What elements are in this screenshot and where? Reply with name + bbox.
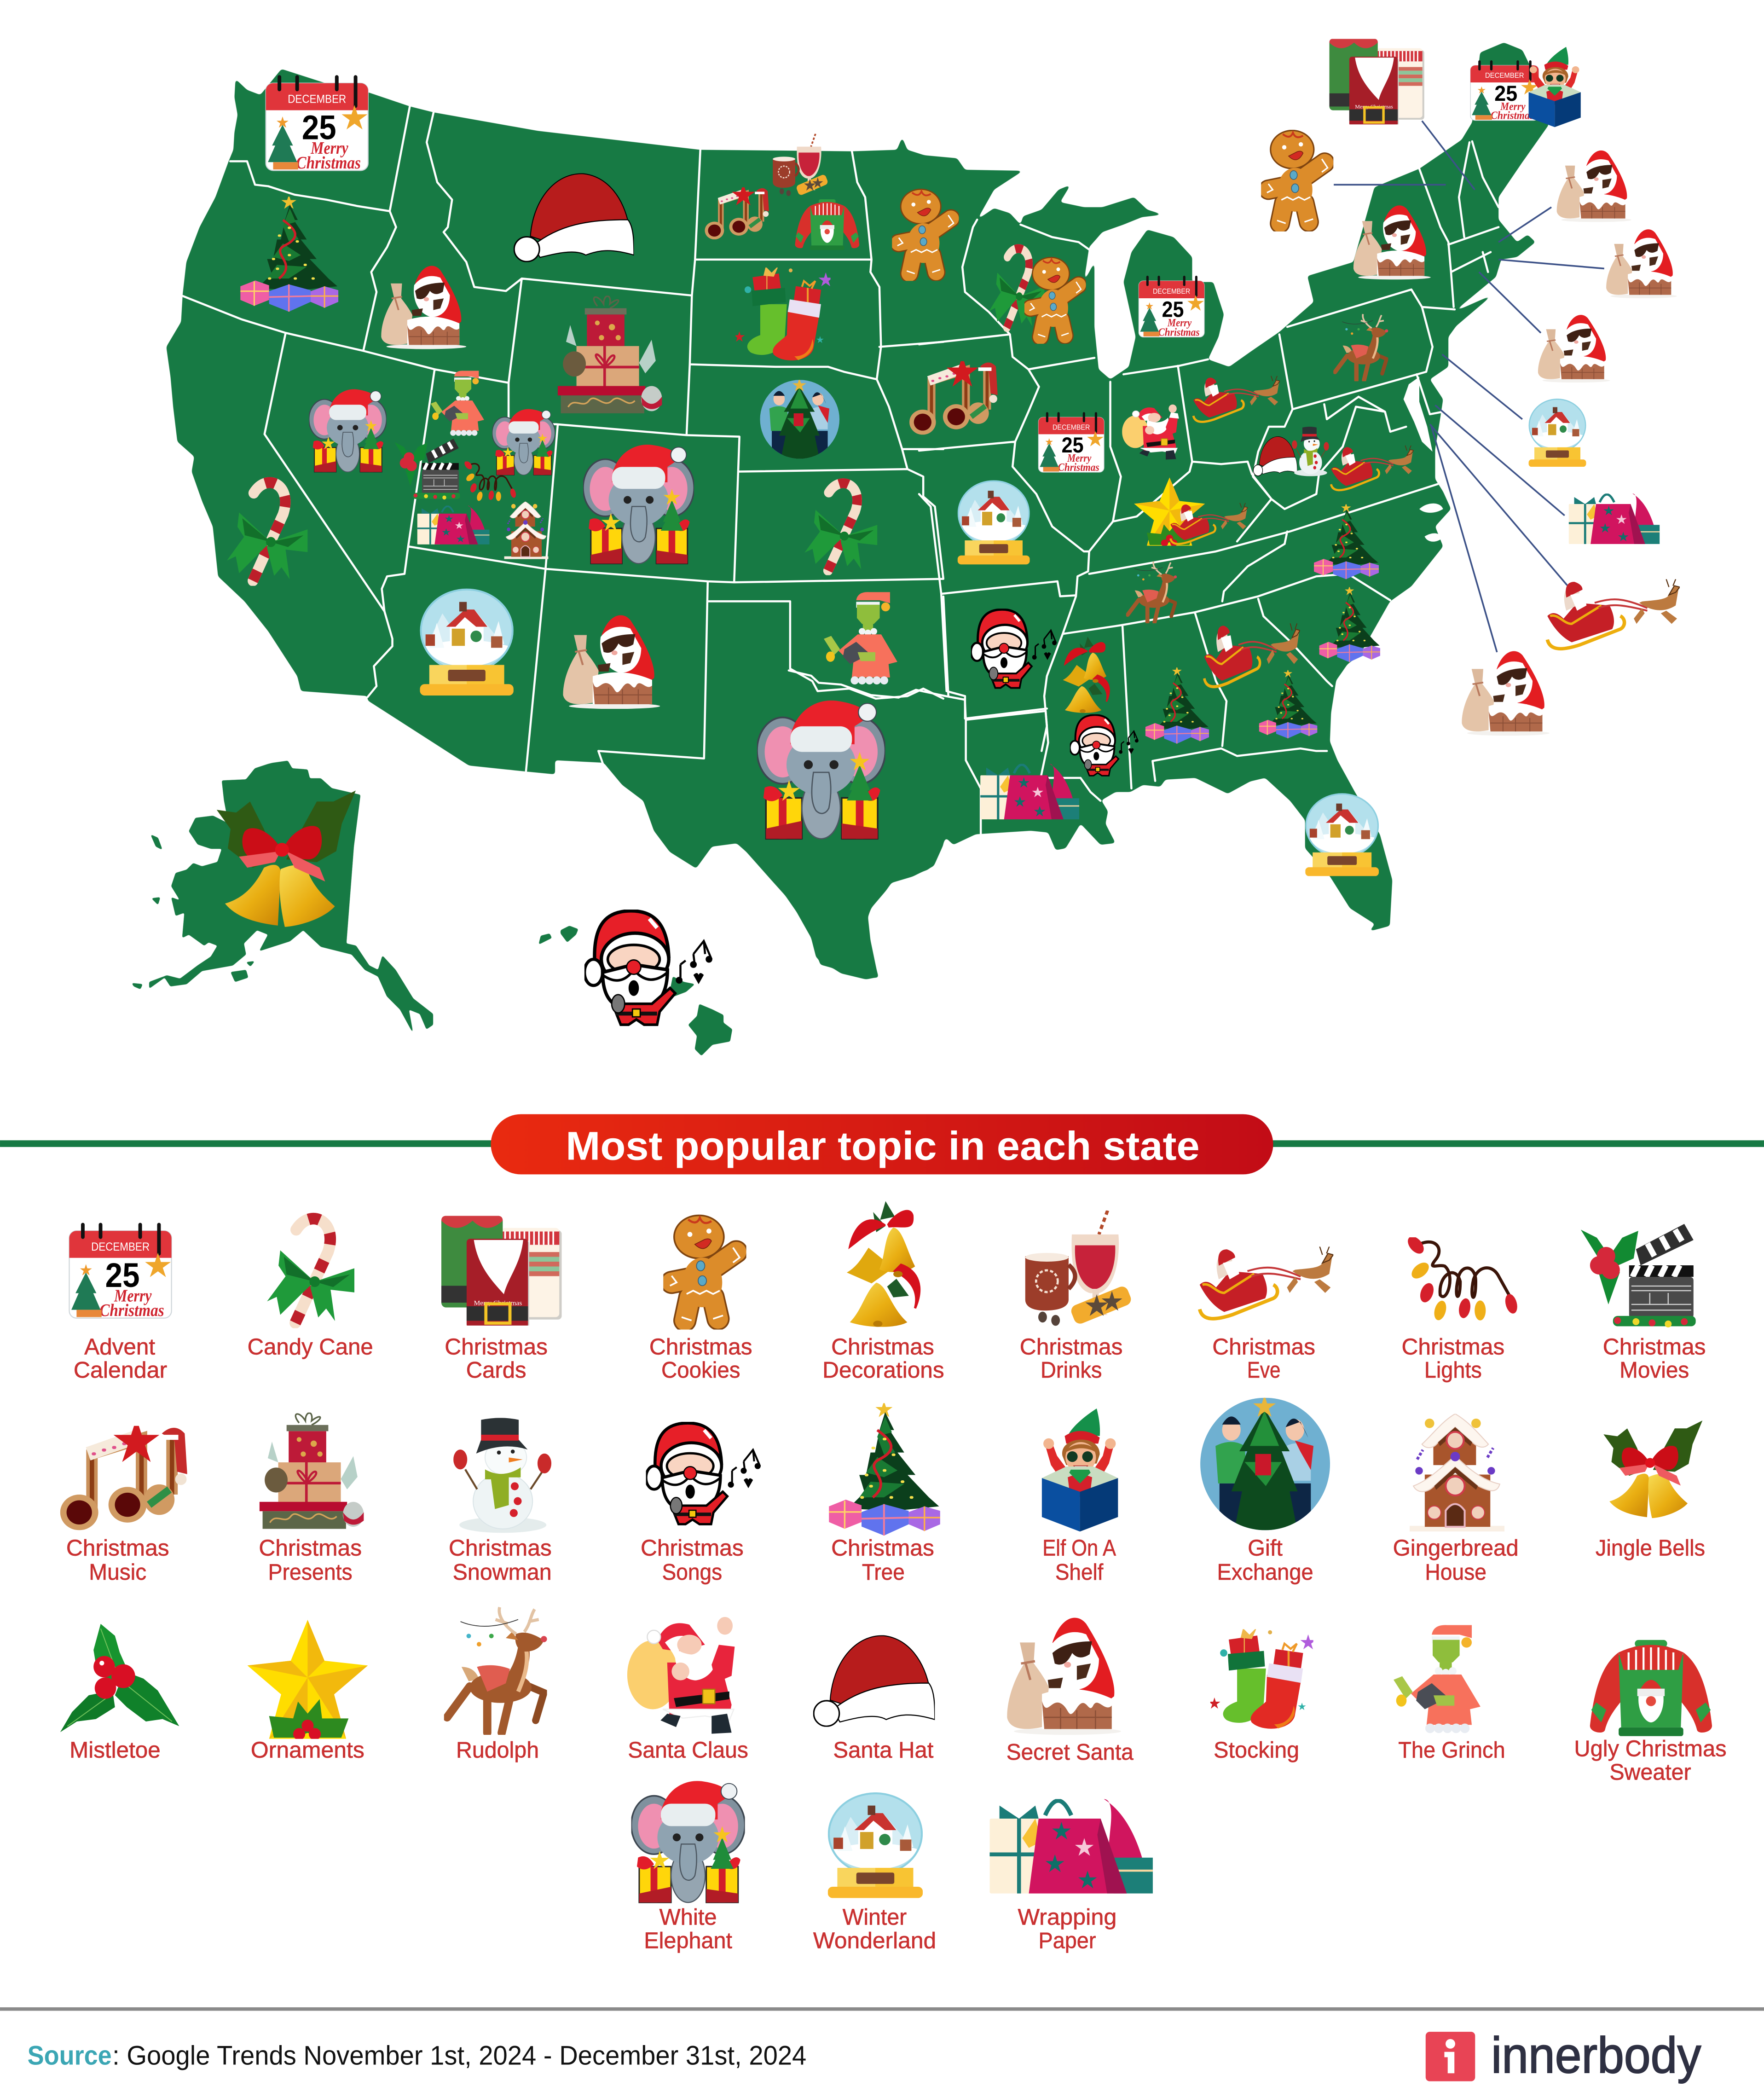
legend: Gingerbread House: House [1425, 1559, 1486, 1585]
icon: Colorado white elephant [583, 445, 694, 563]
icon: Arizona winter wonderland [420, 590, 514, 695]
icon: Hawaii Christmas songs [584, 911, 712, 1025]
footer rule [0, 2007, 1764, 2011]
legend: Christmas Songs [641, 1423, 761, 1585]
icon: Vermont Christmas cards [1330, 39, 1424, 128]
icon: North Dakota Christmas music [705, 184, 769, 239]
icon: Alaska jingle bells [217, 790, 356, 927]
icon: Wisconsin candy cane [989, 249, 1045, 328]
legend: Elf On A Shelf: Elf On A [1042, 1536, 1116, 1561]
legend: Christmas Eve: Christmas [1212, 1334, 1315, 1359]
legend: Wrapping Paper [989, 1799, 1153, 1953]
icon: California candy cane [227, 482, 307, 581]
legend: Santa Hat: Santa Hat [833, 1737, 934, 1762]
legend: Advent Calendar [69, 1225, 172, 1383]
legend: Christmas Tree: Tree [862, 1559, 905, 1585]
legend: Christmas Snowman [449, 1418, 552, 1585]
legend: Christmas Songs: Christmas [641, 1536, 744, 1561]
icon: North Dakota ugly sweater [795, 199, 859, 250]
legend: Ornaments [248, 1620, 368, 1762]
icon: Kentucky Christmas Eve [1170, 503, 1248, 544]
legend: Christmas Cookies: Cookies [661, 1357, 740, 1383]
icon: New York area Christmas cookies [1267, 130, 1328, 223]
legend: Jingle Bells [1596, 1420, 1705, 1561]
legend: Christmas Presents: Christmas [259, 1536, 362, 1561]
icon: Indiana Santa Claus [1122, 405, 1179, 460]
legend: Secret Santa: Secret Santa [1006, 1739, 1134, 1765]
state borders [183, 106, 1498, 835]
legend: Ugly Christmas Sweater: Ugly Christmas [1574, 1736, 1727, 1762]
legend: Christmas Movies: Movies [1619, 1357, 1689, 1383]
legend: Jingle Bells: Jingle Bells [1596, 1536, 1705, 1561]
icon: Wisconsin Christmas cookies [1029, 257, 1081, 337]
legend: Christmas Music [60, 1418, 187, 1585]
coastal inlets: Chesapeake Bay and Carolina sounds [1404, 377, 1443, 542]
legend [60, 1201, 1727, 1953]
icon: Louisiana Christmas songs [1070, 715, 1139, 776]
legend: White Elephant: White [659, 1905, 717, 1930]
icon: Minnesota Christmas cookies [897, 189, 954, 273]
icon: Oregon Christmas tree [240, 195, 338, 312]
legend: Christmas Songs: Songs [662, 1559, 722, 1585]
legend: Secret Santa [1006, 1618, 1134, 1765]
legend: Winter Wonderland: Wonderland [813, 1928, 936, 1953]
leader lines for small north-eastern states [1334, 121, 1604, 652]
icon: Missouri winter wonderland [958, 481, 1030, 564]
legend: Christmas Tree [829, 1401, 940, 1585]
icons on the map [217, 39, 1680, 1025]
legend: Christmas Cards [441, 1216, 562, 1383]
legend: White Elephant [631, 1781, 745, 1953]
legend: Christmas Music: Christmas [66, 1536, 169, 1561]
legend: Christmas Eve [1200, 1246, 1333, 1383]
legend: Santa Claus: Santa Claus [628, 1737, 748, 1762]
legend: Christmas Decorations: Christmas [831, 1334, 934, 1359]
legend: Advent Calendar: Calendar [74, 1357, 167, 1383]
legend: The Grinch: The Grinch [1398, 1737, 1505, 1762]
legend: Ugly Christmas Sweater: Sweater [1609, 1759, 1691, 1785]
icon: Virginia Christmas Eve [1331, 446, 1414, 490]
legend: Ornaments: Ornaments [251, 1737, 364, 1762]
legend: Advent Calendar: Advent [84, 1334, 155, 1359]
icon: Idaho secret Santa [381, 266, 466, 349]
legend: Candy Cane: Candy Cane [248, 1334, 373, 1359]
heading banner [491, 1114, 1273, 1174]
icon: Nebraska gift exchange [760, 378, 839, 459]
icon: Arkansas Christmas songs [971, 609, 1057, 688]
legend: Wrapping Paper: Paper [1038, 1928, 1096, 1953]
legend: Christmas Decorations: Decorations [822, 1357, 944, 1383]
icon: New Hampshire elf on a shelf [1529, 47, 1581, 127]
icon: Nevada white elephant [309, 389, 387, 472]
legend: Christmas Presents [259, 1413, 364, 1585]
legend: Christmas Eve: Eve [1247, 1357, 1280, 1383]
icon: Utah gingerbread house [504, 502, 548, 559]
icon: New Mexico secret Santa [563, 615, 660, 709]
legend: Christmas Snowman: Christmas [449, 1536, 552, 1561]
legend: Christmas Presents: Presents [268, 1559, 353, 1585]
icon: Maryland Christmas Eve [1547, 579, 1680, 649]
icon: District of Columbia secret Santa [1462, 651, 1550, 736]
legend: Christmas Cookies [649, 1215, 752, 1383]
legend: Rudolph [447, 1607, 547, 1762]
legend: Gift Exchange [1200, 1395, 1330, 1585]
map: contiguous United States [166, 42, 1549, 979]
legend: Ugly Christmas Sweater [1574, 1640, 1727, 1785]
icon: Montana Santa hat [514, 174, 634, 261]
icon: South Carolina Christmas tree [1319, 586, 1380, 662]
icon: West Virginia Santa hat [1253, 436, 1297, 476]
legend: Mistletoe: Mistletoe [69, 1737, 161, 1762]
icon: Utah white elephant [492, 409, 555, 475]
icon: Washington advent calendar [266, 77, 368, 173]
legend: Rudolph: Rudolph [456, 1737, 539, 1762]
legend: Christmas Lights: Lights [1424, 1357, 1482, 1383]
legend: Christmas Music: Music [89, 1559, 146, 1585]
source note: Source [28, 2040, 112, 2070]
icon: South Dakota stocking [734, 267, 833, 360]
legend: Mistletoe [60, 1624, 179, 1762]
icon: Illinois advent calendar [1038, 413, 1104, 474]
map: Hawaii [538, 926, 732, 1056]
icon: Maine advent calendar [1470, 62, 1538, 122]
icon: Tennessee Rudolph [1128, 562, 1177, 622]
legend: Christmas Cookies: Christmas [649, 1334, 752, 1359]
icon: Utah the Grinch [431, 371, 484, 436]
icon: Louisiana wrapping paper [980, 764, 1079, 819]
legend: Santa Claus [627, 1617, 748, 1762]
icon: Oklahoma the Grinch [824, 592, 897, 684]
icon: Georgia Christmas Eve [1204, 623, 1300, 687]
legend: Gingerbread House [1393, 1414, 1519, 1585]
legend: Stocking [1209, 1629, 1316, 1762]
icon: Kansas candy cane [804, 483, 877, 571]
legend: Christmas Snowman: Snowman [453, 1559, 552, 1585]
icon: Utah Christmas movies [394, 439, 460, 499]
icon: Rhode Island secret Santa [1606, 229, 1677, 298]
legend: Christmas Tree: Christmas [831, 1536, 934, 1561]
icon: Alabama Christmas tree [1145, 666, 1209, 744]
icon: Georgia Christmas tree [1259, 669, 1317, 738]
icon: Pennsylvania Rudolph [1335, 314, 1388, 380]
icon: West Virginia snowman [1292, 427, 1329, 476]
legend: Christmas Movies: Christmas [1603, 1334, 1706, 1359]
legend: Christmas Drinks: Drinks [1041, 1357, 1102, 1383]
legend: Wrapping Paper: Wrapping [1018, 1905, 1116, 1930]
icon: Utah Christmas lights [463, 460, 517, 502]
icon: Massachusetts secret Santa [1557, 151, 1631, 222]
legend: Christmas Lights [1401, 1234, 1519, 1383]
legend: Gift Exchange: Exchange [1217, 1559, 1313, 1585]
legend: Christmas Cards: Cards [466, 1357, 526, 1383]
legend: Christmas Cards: Christmas [445, 1334, 548, 1359]
icon: Connecticut secret Santa [1538, 315, 1610, 383]
legend: Christmas Lights: Christmas [1401, 1334, 1504, 1359]
legend: Santa Hat [814, 1636, 935, 1762]
legend: The Grinch [1394, 1625, 1505, 1762]
legend: Gingerbread House: Gingerbread [1393, 1536, 1519, 1561]
icon: Iowa Christmas music [909, 356, 998, 435]
icon: Texas white elephant [757, 701, 885, 839]
innerbody logo: innerbody [1491, 2027, 1701, 2084]
icon: Kentucky ornaments [1134, 477, 1205, 546]
source note: : Google Trends November 1st, 2024 - December 31st, 2024 [112, 2040, 806, 2070]
icon: New York secret Santa [1353, 205, 1431, 279]
icon: Mississippi Christmas decorations [1063, 637, 1109, 713]
heading banner: Most popular topic in each state [566, 1124, 1200, 1168]
icon: New Jersey winter wonderland [1529, 399, 1586, 467]
legend: Christmas Movies [1581, 1224, 1706, 1383]
legend: Winter Wonderland [813, 1793, 936, 1953]
legend: Christmas Decorations [822, 1201, 944, 1383]
icon: Michigan advent calendar [1139, 277, 1204, 338]
icon: Delaware wrapping paper [1569, 493, 1660, 544]
legend: Stocking: Stocking [1214, 1737, 1299, 1762]
icon: Wyoming Christmas presents [558, 296, 662, 413]
legend: White Elephant: Elephant [644, 1928, 732, 1953]
legend: Candy Cane [248, 1219, 373, 1359]
map: Alaska [132, 761, 433, 1034]
icon: Florida winter wonderland [1305, 794, 1379, 876]
legend: Elf On A Shelf: Shelf [1055, 1559, 1104, 1585]
legend: Gift Exchange: Gift [1248, 1536, 1283, 1561]
legend: Elf On A Shelf [1042, 1408, 1118, 1585]
icon: Ohio Christmas Eve [1193, 376, 1280, 422]
legend: Christmas Drinks: Christmas [1020, 1334, 1123, 1359]
icon: North Carolina Christmas tree [1314, 503, 1379, 579]
legend: Winter Wonderland: Winter [843, 1905, 907, 1930]
legend: Christmas Drinks [1020, 1211, 1133, 1383]
icon: Utah wrapping paper [417, 505, 490, 545]
section divider line [0, 1140, 1764, 1147]
icon: North Dakota Christmas drinks [773, 134, 828, 196]
